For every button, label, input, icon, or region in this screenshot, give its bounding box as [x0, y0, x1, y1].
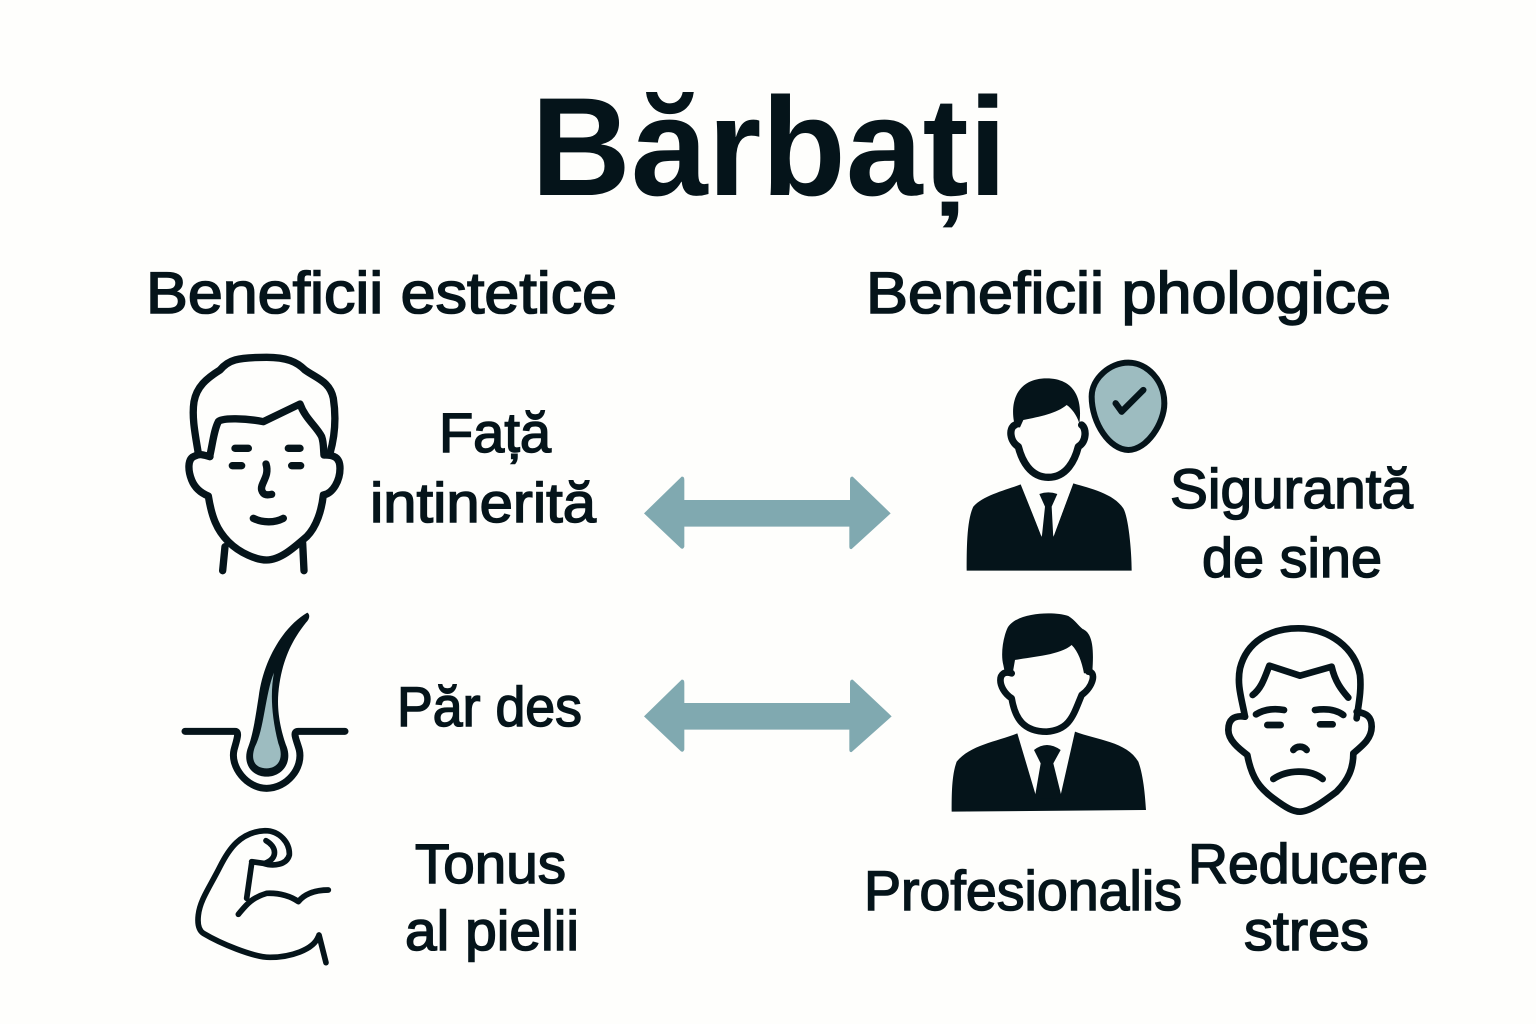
label: self-confidence	[1170, 457, 1414, 589]
head outline	[1000, 672, 1093, 732]
label: stress reduction: stres	[1244, 899, 1369, 962]
label: young face: Față	[439, 401, 552, 464]
shield	[1092, 363, 1164, 450]
hair	[1002, 613, 1093, 673]
label: stress reduction: Reducere	[1188, 832, 1428, 895]
label: professionalism: Profesionalis	[864, 859, 1182, 922]
white shirt	[1022, 485, 1073, 535]
hair	[1013, 378, 1080, 427]
label: skin tone	[405, 832, 579, 962]
title: Bărbați	[531, 68, 1007, 228]
heading: psychological benefits: Beneficii phologice	[866, 261, 1391, 326]
tie	[1039, 492, 1057, 538]
label: stress reduction	[1188, 832, 1428, 962]
arrow: top double arrow	[644, 477, 891, 549]
label: young face: intinerită	[370, 471, 597, 534]
label: self-confidence: de sine	[1202, 526, 1382, 589]
head outline	[1011, 425, 1085, 477]
heading: aesthetic benefits: Beneficii estetice	[146, 261, 617, 326]
icon: young face	[189, 357, 340, 571]
shirt	[1019, 734, 1074, 794]
check mark	[1116, 390, 1143, 412]
icon: confident man with shield	[967, 363, 1164, 571]
label: skin tone: al pielii	[405, 899, 579, 962]
suit	[952, 732, 1146, 812]
body of suit	[967, 483, 1132, 571]
label: thick hair: Păr des	[397, 675, 582, 738]
tie	[1034, 745, 1062, 798]
label: young face	[370, 401, 597, 534]
label: skin tone: Tonus	[415, 832, 566, 895]
icon: hair follicle	[185, 613, 345, 788]
icon: professional man	[952, 613, 1146, 812]
label: self-confidence: Sigurantă	[1170, 457, 1414, 520]
icon: flexed arm	[198, 831, 328, 963]
arrow: lower double arrow	[644, 680, 892, 752]
icon: stressed face	[1228, 628, 1372, 812]
